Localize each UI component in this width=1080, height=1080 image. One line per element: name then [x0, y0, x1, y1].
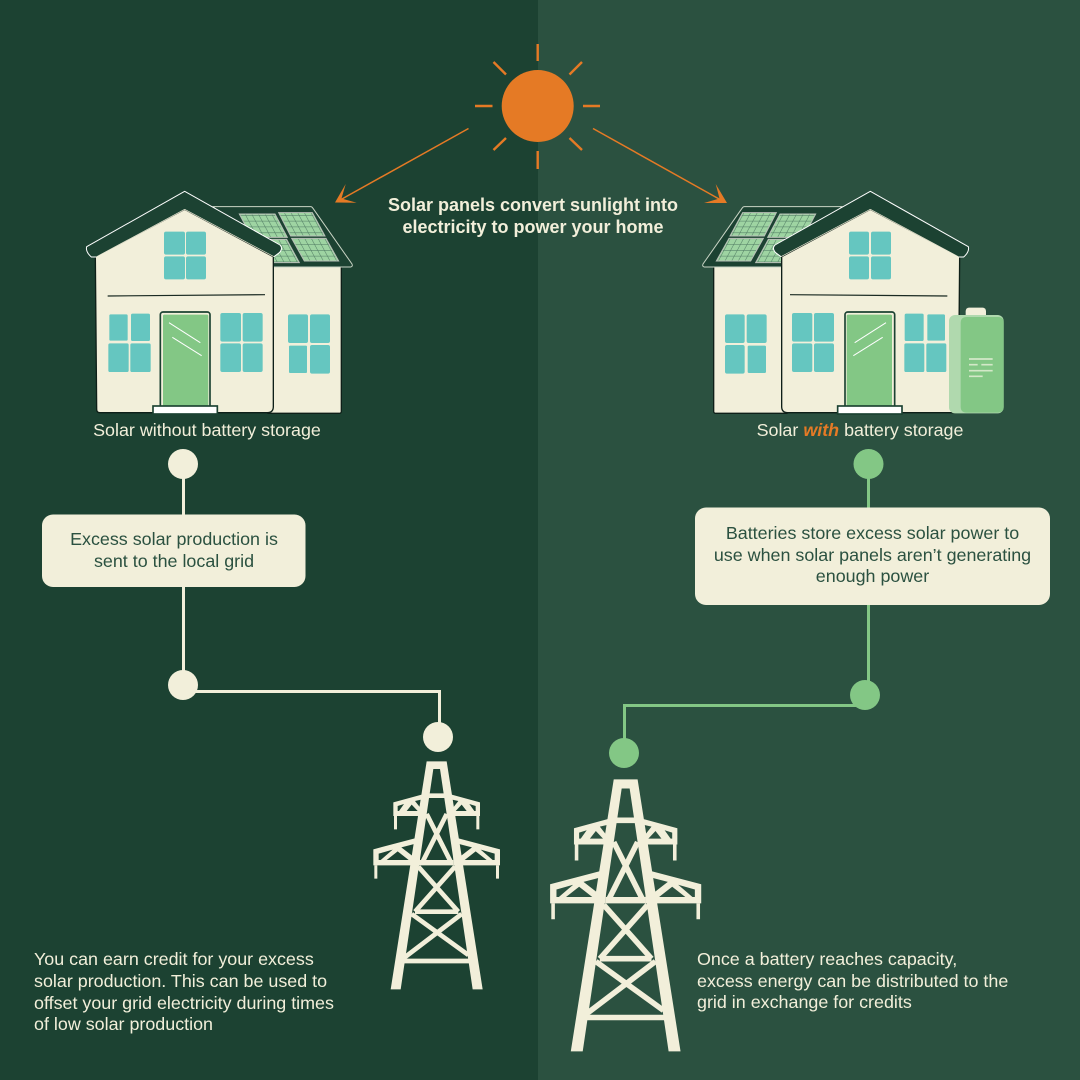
main body — [95, 209, 273, 413]
arrow: sun to left house — [335, 128, 468, 203]
connector: left path — [168, 449, 453, 752]
heading: solar panels: Solar panels convert sunlight into — [388, 195, 678, 215]
callout: excess production — [42, 514, 306, 587]
floor line — [108, 295, 265, 296]
text: battery capacity: Once a battery reaches capacity, — [697, 949, 957, 969]
icon: left pylon — [373, 761, 500, 989]
step — [153, 406, 217, 414]
callout: batteries store — [695, 508, 1050, 605]
background: left panel — [0, 0, 538, 1080]
icon: sun — [475, 44, 600, 169]
main roof — [86, 191, 282, 257]
background: right panel — [538, 0, 1080, 1080]
icon: house with battery — [703, 191, 1004, 414]
text: earn credit: You can earn credit for your excess — [34, 949, 314, 969]
arrow: sun to right house — [593, 128, 727, 203]
wing roof — [213, 207, 352, 267]
connector: right path — [609, 449, 884, 768]
callout: excess production: Excess solar production is — [70, 529, 278, 549]
icon: right pylon — [550, 779, 701, 1051]
callout: batteries store: enough power — [816, 566, 929, 586]
heading: solar panels: electricity to power your home — [402, 217, 664, 237]
door — [160, 312, 210, 409]
house shell — [703, 191, 969, 414]
text: battery capacity: excess energy can be distributed to the — [697, 971, 1008, 991]
windows and battery — [725, 232, 1004, 413]
label: with battery: Solar with battery storage — [757, 420, 963, 440]
wing body — [267, 265, 341, 413]
text: earn credit: of low solar production — [34, 1014, 213, 1034]
callout: batteries store: Batteries store excess solar power to — [726, 523, 1019, 543]
callout: batteries store: use when solar panels aren’t generating — [714, 545, 1031, 565]
icon: house without battery — [86, 191, 352, 414]
battery — [949, 308, 1004, 413]
callout: excess production: sent to the local grid — [94, 551, 254, 571]
text: battery capacity: grid in exchange for credits — [697, 992, 912, 1012]
windows — [108, 232, 330, 374]
text: earn credit: solar production. This can be used to — [34, 971, 327, 991]
text: earn credit: offset your grid electricity during times — [34, 993, 334, 1013]
label: without battery: Solar without battery storage — [93, 420, 321, 440]
solar panels — [239, 213, 339, 263]
